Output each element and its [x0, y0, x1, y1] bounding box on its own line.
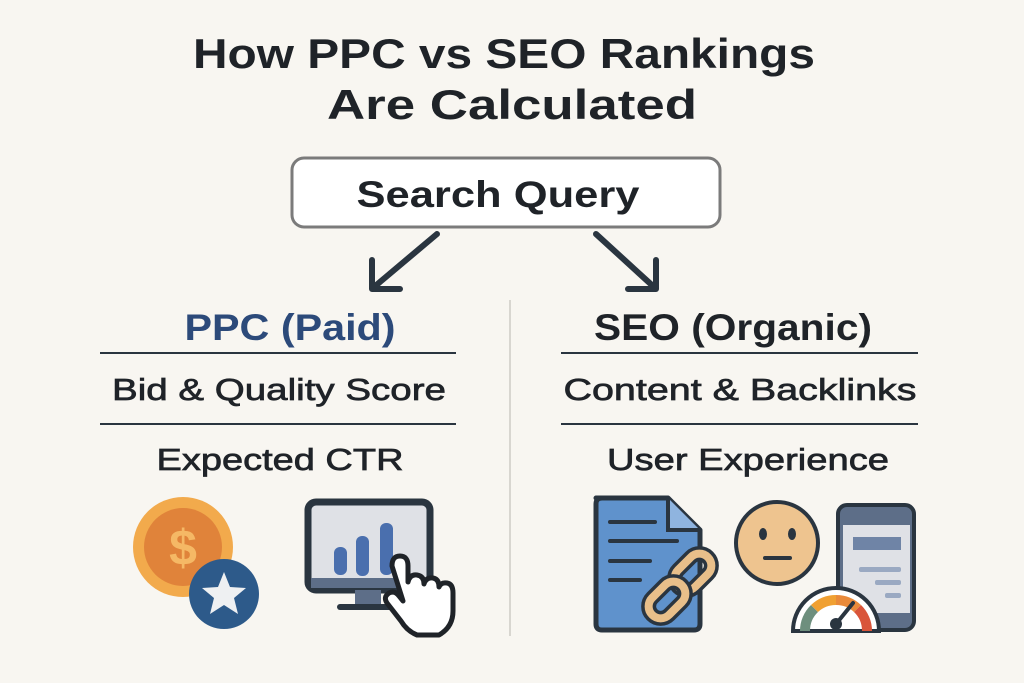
text: user experience: User Experience	[607, 442, 889, 477]
text: bid & quality score: Bid & Quality Score	[112, 372, 446, 407]
text: expected ctr: Expected CTR	[156, 442, 404, 477]
arrow: left to PPC	[372, 234, 437, 289]
icon: document with chain link	[596, 498, 716, 630]
panel: SEO	[561, 307, 918, 631]
title: Are Calculated	[327, 81, 697, 128]
search query box	[292, 158, 720, 227]
title	[193, 30, 815, 128]
arrow: right to SEO	[596, 234, 656, 289]
heading: SEO (Organic): SEO (Organic)	[594, 307, 872, 348]
icon: coin with star: $	[169, 520, 197, 576]
search query box: Search Query	[356, 174, 640, 215]
panel: PPC	[100, 307, 456, 635]
heading: PPC (Paid): PPC (Paid)	[184, 307, 396, 348]
icon: monitor with chart and hand	[308, 502, 453, 635]
icon: phone with speed gauge	[793, 505, 914, 631]
title: How PPC vs SEO Rankings	[193, 30, 815, 77]
icon: neutral face	[736, 502, 818, 584]
text: content & backlinks: Content & Backlinks	[564, 372, 916, 407]
icon: coin with star	[133, 497, 259, 629]
